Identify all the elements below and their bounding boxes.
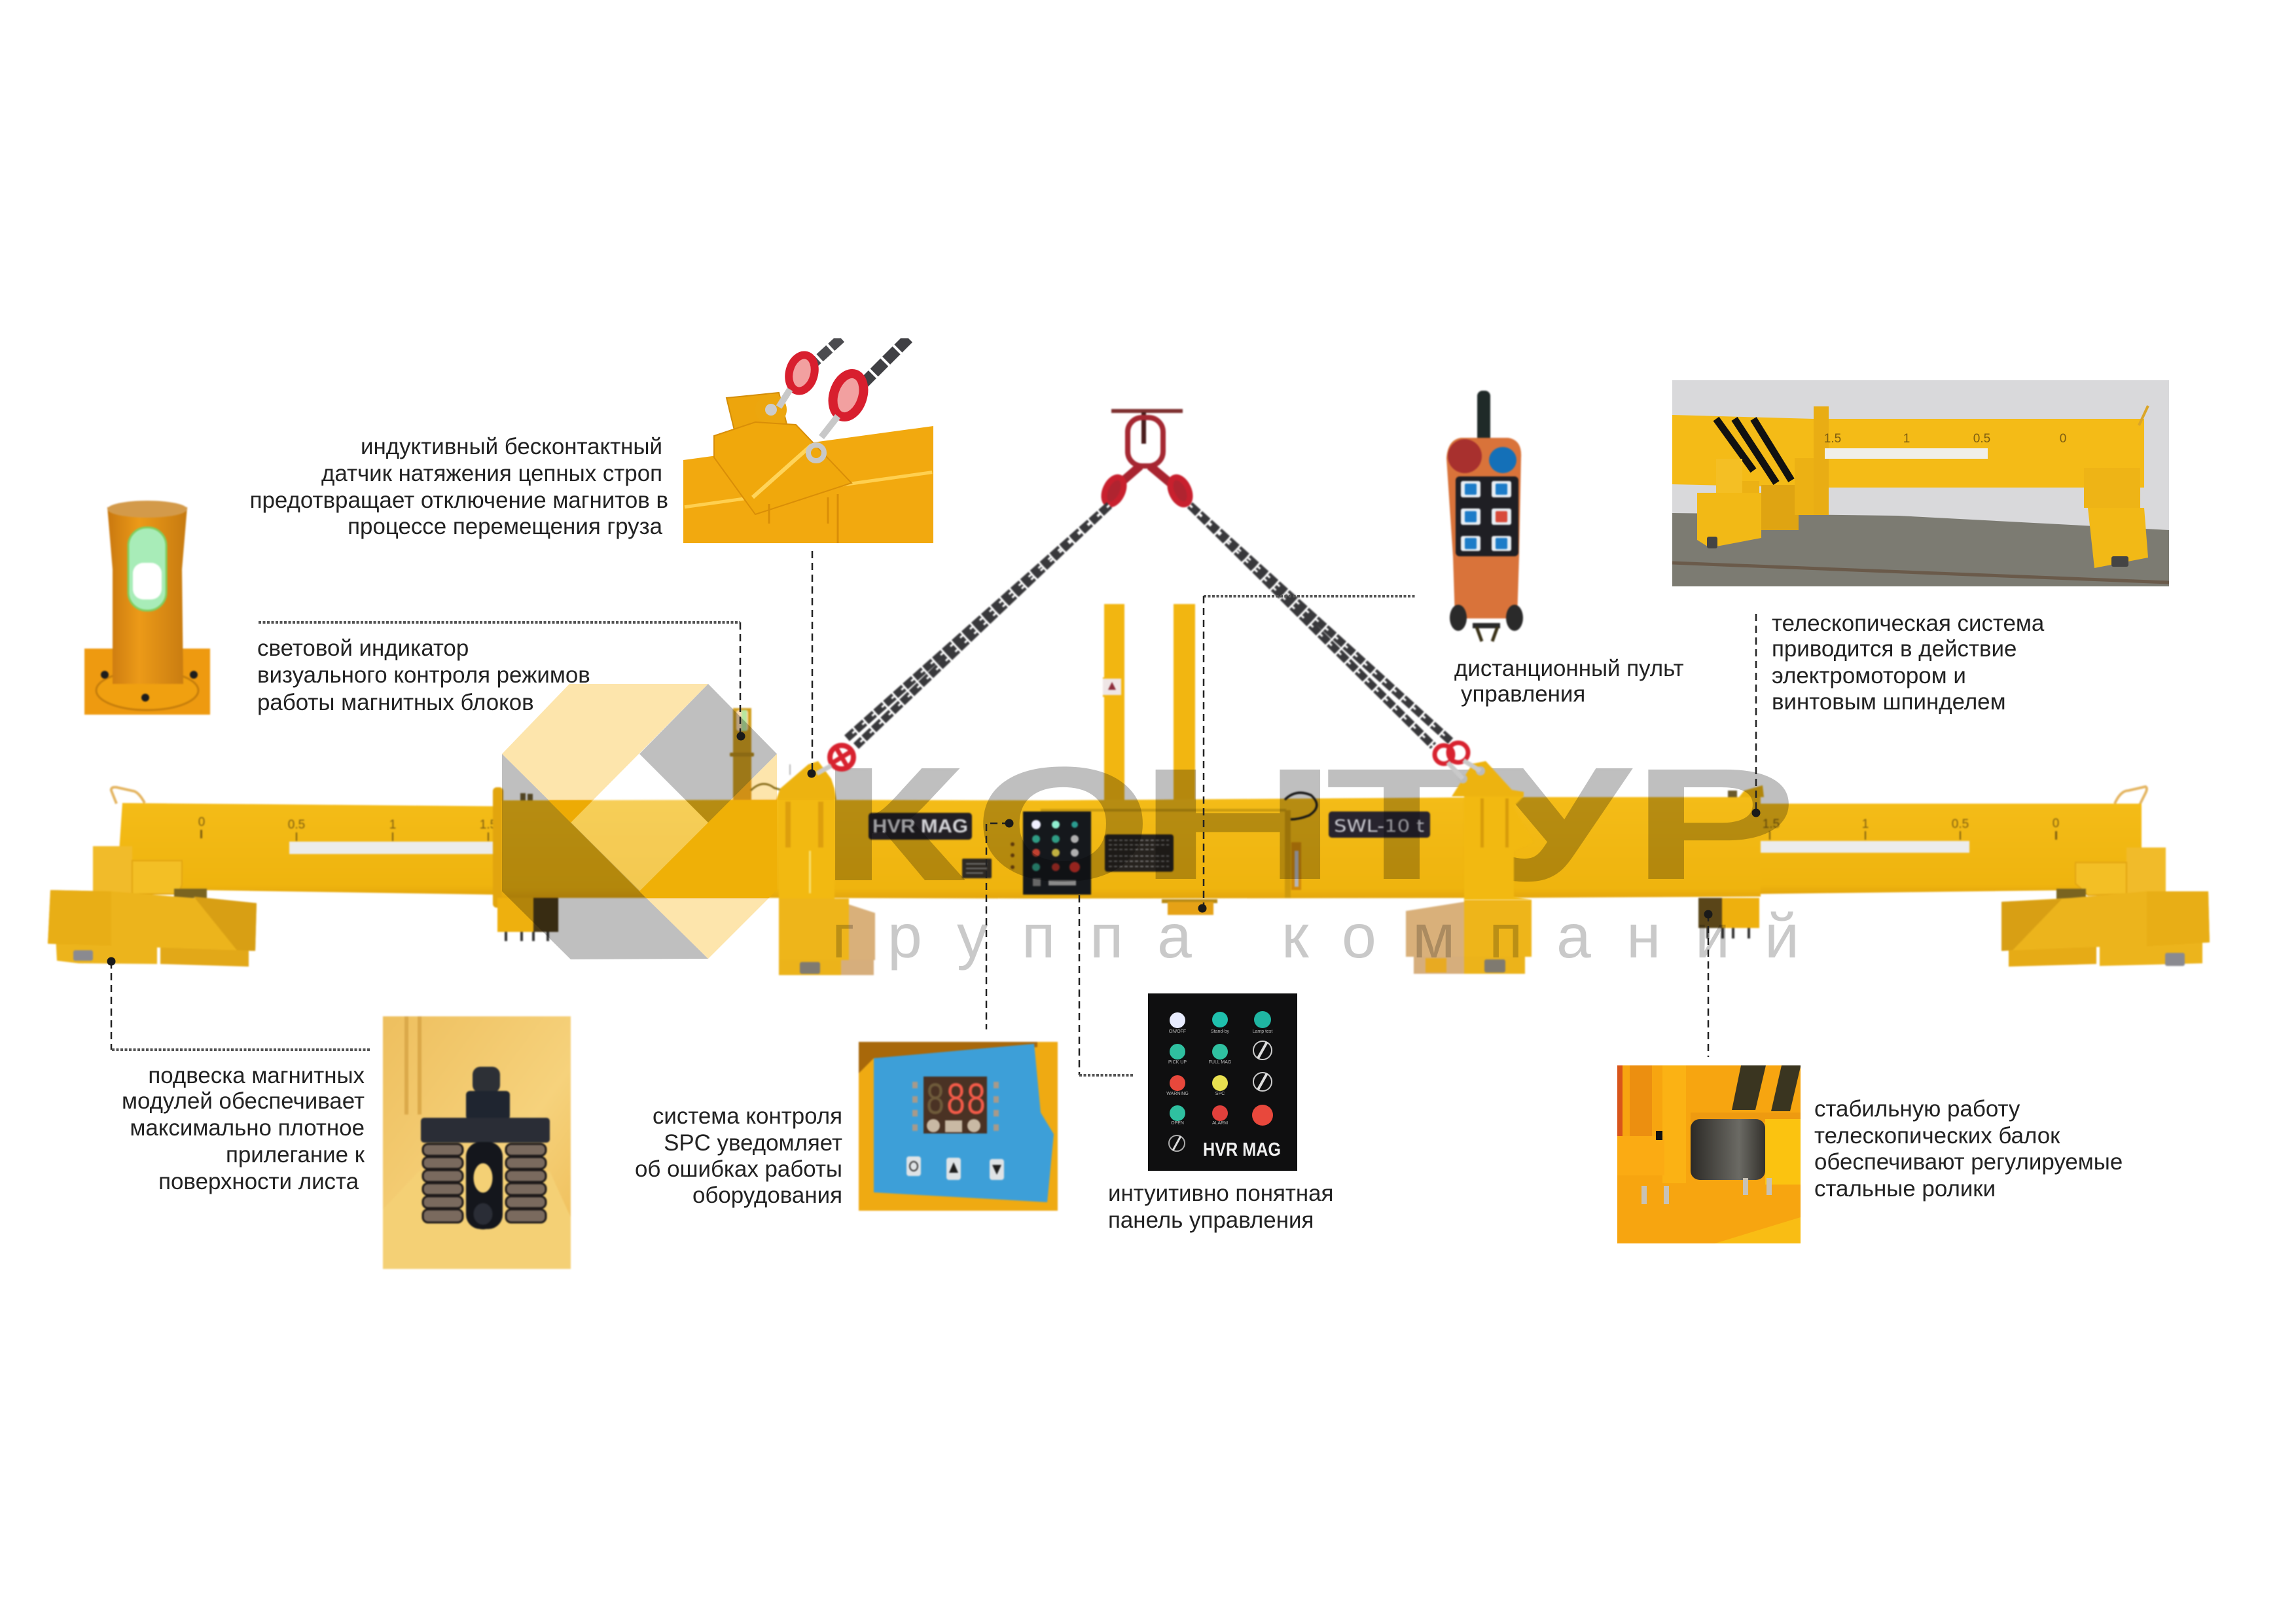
left extension beam: 1.5 [480, 818, 497, 832]
photo: control panel: HVR MAG [1203, 1139, 1281, 1160]
photo: SPC controller: 88 [946, 1077, 986, 1128]
left magnet module [48, 846, 257, 967]
photo: steel rollers [1617, 1065, 1801, 1243]
chain: right sling [1190, 505, 1451, 746]
logo band on beam: upper left [548, 800, 592, 823]
photo: control panel: Stand-by [1211, 1029, 1230, 1034]
leader: telescopic [1751, 614, 1761, 817]
photo: telescopic system: 0.5 [1973, 432, 1990, 446]
text: sling tension sensor: процессе перемещения груза [348, 514, 663, 539]
text: rollers: стальные ролики [1814, 1176, 1996, 1202]
photo: control panel [1148, 993, 1297, 1171]
text: telescopic system: телескопическая система [1772, 611, 2045, 636]
right extension beam: 0 [2053, 817, 2059, 830]
HVR MAG plate [869, 813, 972, 840]
text: sling tension sensor: датчик натяжения цепных строп [321, 461, 662, 486]
text: SPC [635, 1103, 842, 1208]
text: magnet suspension: модулей обеспечивает [122, 1088, 365, 1114]
text: sling tension sensor: индуктивный бесконтактный [361, 434, 662, 459]
SWL plate: SWL-10 t [1334, 817, 1424, 836]
right extension beam: 1.5 [1763, 817, 1780, 831]
logo wordmark: Р [1632, 736, 1797, 913]
logo wordmark: К [822, 735, 965, 913]
left extension beam: 0.5 [288, 818, 305, 832]
left extension beam: 0 [198, 815, 205, 829]
text: light indicator: световой индикатор [257, 635, 469, 661]
text: light indicator: визуального контроля режимов [257, 662, 590, 688]
text: SPC: SPC уведомляет [664, 1130, 842, 1156]
text: magnet suspension: максимально плотное [130, 1115, 365, 1141]
text: remote control [1454, 656, 1684, 707]
text: control panel: интуитивно понятная [1108, 1181, 1333, 1206]
logo wordmark: О [976, 735, 1151, 913]
text: sling tension sensor [250, 434, 668, 539]
photo: control panel: Lamp test [1253, 1029, 1272, 1034]
logo wordmark [822, 735, 1797, 913]
logo subtitle: группакомпаний [832, 902, 1799, 971]
logo wordmark: Т [1325, 735, 1478, 913]
text: telescopic system: винтовым шпинделем [1772, 689, 2006, 715]
text: rollers [1814, 1096, 2123, 1202]
photo: telescopic system [1672, 380, 2169, 586]
leader: light indicator [259, 622, 745, 741]
photo: sling sensor [683, 338, 933, 543]
right magnet module [2001, 847, 2210, 967]
logo wordmark: Н [1137, 735, 1339, 913]
text: magnet suspension: подвеска магнитных [148, 1063, 365, 1088]
right extension beam: 0.5 [1952, 817, 1969, 831]
chain: left sling [847, 505, 1109, 746]
photo: control panel: WARNING [1166, 1092, 1189, 1096]
central beam [502, 793, 1761, 915]
photo: control panel: OPEN [1171, 1121, 1184, 1126]
photo: control panel: PICK UP [1168, 1060, 1187, 1065]
shackles: left red connector [817, 745, 853, 774]
photo: control panel: ON/OFF [1169, 1029, 1186, 1034]
left extension beam [111, 787, 497, 895]
leader: suspension [107, 957, 371, 1050]
photo: control panel: ALARM [1212, 1121, 1228, 1126]
left inner magnet [779, 899, 875, 975]
right extension beam [1761, 787, 2147, 894]
text: rollers: телескопических балок [1814, 1123, 2060, 1149]
logo centre diamond highlight on beam [571, 754, 708, 891]
photo: control panel: SPC [1215, 1092, 1225, 1096]
leader: rollers [1704, 910, 1712, 1057]
text: telescopic system: электромотором и [1772, 663, 1966, 688]
data plate [1105, 834, 1174, 872]
left roller housing [493, 787, 558, 941]
right lifting lug and pillar [1452, 761, 1534, 900]
right inner magnet [1406, 900, 1532, 974]
text: remote control: дистанционный пульт [1454, 656, 1684, 681]
photo: telescopic system: 1.5 [1824, 432, 1841, 446]
text: SPC: система контроля [653, 1103, 842, 1129]
text: SPC: оборудования [692, 1183, 842, 1208]
text: light indicator [257, 635, 590, 715]
right roller housing [1698, 785, 1764, 938]
photo: SPC controller: 8 [925, 1077, 945, 1128]
text: rollers: стабильную работу [1814, 1096, 2020, 1122]
logo wordmark: У [1488, 735, 1632, 913]
machine: lifting beam [48, 409, 2210, 975]
text: SPC: об ошибках работы [635, 1156, 842, 1182]
chain master link [1100, 409, 1194, 507]
leader: remote [1198, 596, 1416, 912]
photo: telescopic system: 1 [1903, 432, 1910, 446]
photo: light indicator [84, 501, 210, 715]
text: control panel [1108, 1181, 1333, 1233]
left lifting lug and pillar [776, 761, 836, 899]
SWL plate [1329, 812, 1430, 838]
control panel on beam [1023, 812, 1091, 895]
photo: remote control [1446, 391, 1523, 641]
leader: intuitive panel [1079, 895, 1133, 1075]
small plate and bolts [962, 842, 1014, 878]
left extension beam: 1 [389, 818, 396, 832]
photo: SPC controller [859, 1042, 1058, 1211]
text: telescopic system [1772, 611, 2045, 715]
leader: chain sensor [808, 551, 816, 777]
text: magnet suspension: поверхности листа [158, 1169, 359, 1194]
HVR MAG plate: HVR MAG [872, 816, 968, 837]
photo: magnet suspension [383, 1016, 571, 1269]
text: sling tension sensor: предотвращает отключение магнитов в [250, 488, 668, 513]
logo: КОНТУР group [502, 684, 1799, 971]
shackles: right red connector [1435, 743, 1480, 779]
photo: telescopic system: 0 [2060, 432, 2066, 446]
text: magnet suspension: прилегание к [226, 1142, 365, 1168]
text: rollers: обеспечивают регулируемые [1814, 1149, 2123, 1175]
text: remote control: управления [1461, 681, 1585, 707]
uprights [1103, 604, 1195, 800]
text: telescopic system: приводится в действие [1772, 636, 2017, 662]
right extension beam: 1 [1862, 817, 1869, 831]
logo band on beam: lower right [639, 800, 777, 898]
leader: SPC [986, 819, 1013, 1029]
text: light indicator: работы магнитных блоков [257, 690, 534, 715]
text: magnet suspension [122, 1063, 365, 1194]
light indicator on beam [730, 708, 783, 800]
text: control panel: панель управления [1108, 1207, 1314, 1233]
logo mark [502, 684, 777, 959]
photo: control panel: FULL MAG [1209, 1060, 1231, 1065]
